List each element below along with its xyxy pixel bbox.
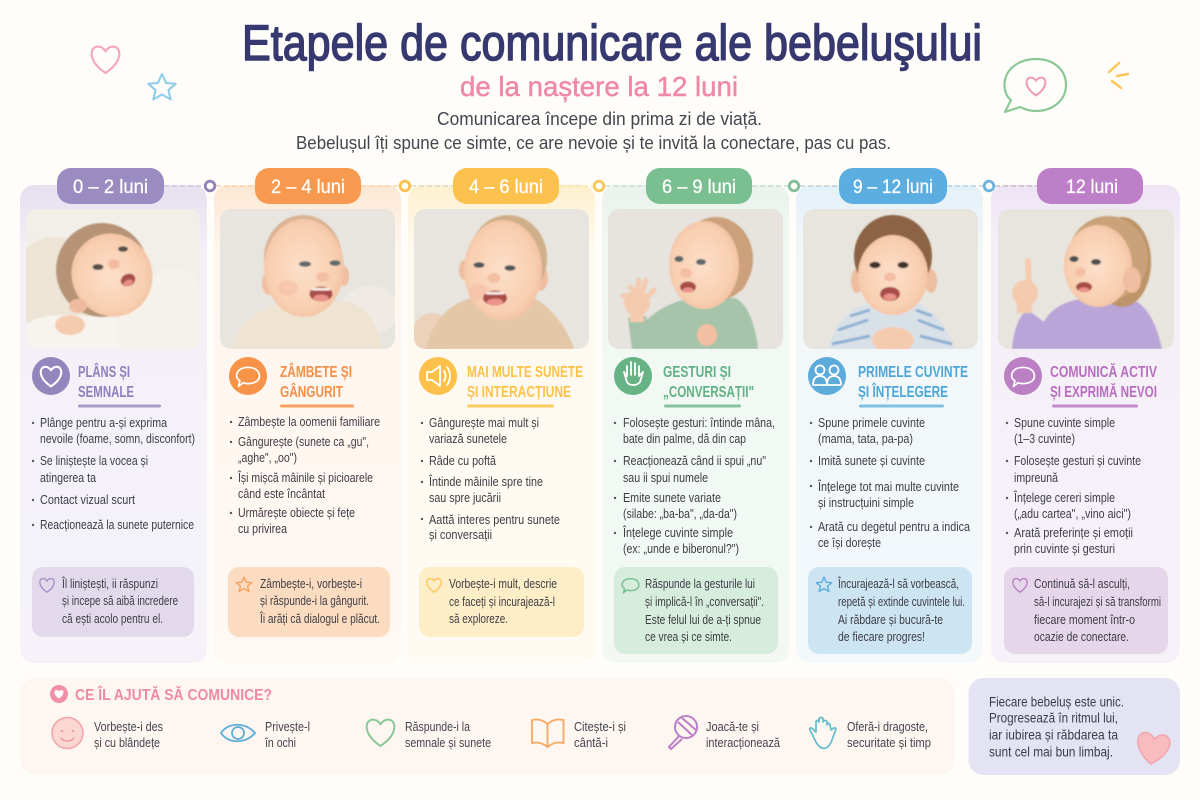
panel: 6–9 luni: [602, 168, 789, 663]
bullet list: („adu cartea", „vino aici"): [1014, 506, 1131, 521]
icon: heart check badge: [50, 685, 68, 703]
heading: MAI MULTE SUNETE: [467, 364, 583, 381]
age pill: [453, 168, 559, 204]
bullet list: Arată preferințe și emoții: [1014, 525, 1133, 540]
photo: newborn lying down: [10, 209, 200, 349]
title: Etapele de comunicare ale bebeluşului: [242, 15, 982, 71]
callout: every baby is unique: [968, 678, 1180, 775]
bullet list: [614, 415, 775, 556]
bullet list: bate din palme, dă din cap: [623, 431, 746, 446]
tip box: și răspunde-i la gângurit.: [260, 593, 369, 608]
heading: ȘI ÎNȚELEGERE: [858, 382, 948, 401]
heading underline: [859, 404, 944, 408]
tip box: fiecare moment într-o: [1034, 612, 1135, 627]
bullet list: variază sunetele: [429, 431, 507, 446]
icon: pink heart: [1135, 732, 1171, 766]
card background: [602, 185, 789, 663]
heading underline: [664, 404, 741, 408]
bullet list: Emite sunete variate: [623, 490, 721, 505]
bullet list: Se liniștește la vocea și: [40, 453, 148, 468]
age pill: 9 – 12 luni: [853, 176, 933, 198]
bullet list: Aattă interes pentru sunete: [429, 512, 560, 527]
heading: ZÂMBETE ȘI: [280, 362, 352, 381]
bullet list: impreună: [1014, 470, 1059, 485]
panel: 4–6 luni: [408, 168, 595, 663]
icon: hand gesture: [614, 357, 652, 395]
callout: every baby is unique: iar iubirea și răbdarea ta: [989, 726, 1118, 742]
item: read: [532, 719, 626, 750]
tip box: ce vrea și ce simte.: [645, 629, 732, 644]
callout: every baby is unique: Progresează în ritmul lui,: [989, 710, 1118, 726]
bullet list: Râde cu poftă: [429, 453, 497, 468]
bullet list: Înțelege cuvinte simple: [622, 525, 733, 540]
photo: laughing baby: [412, 209, 589, 357]
bullet list: (ex: „unde e biberonul?"): [623, 541, 739, 556]
tip box: de fiecare progres!: [838, 629, 925, 644]
bullet list: [32, 415, 195, 532]
bullet list: atingerea ta: [40, 470, 97, 485]
item: eye contact: [221, 719, 310, 750]
bullet list: cu privirea: [238, 521, 288, 536]
bullet list: Arată cu degetul pentru a indica: [818, 519, 971, 534]
bullet list: [810, 415, 971, 550]
tip box: repetă și extinde cuvintele lui.: [838, 594, 965, 609]
heading underline: [1052, 404, 1138, 408]
bullet list: Gângurește mai mult și: [429, 415, 539, 430]
tip box: Îi arăți că dialogul e plăcut.: [259, 611, 380, 626]
panel: 0–2 luni: [10, 168, 207, 663]
bullet list: Folosește gesturi și cuvinte: [1014, 453, 1141, 468]
timeline node markers: [205, 181, 994, 191]
bullet list: Spune cuvinte simple: [1014, 415, 1115, 430]
intro text: [296, 109, 891, 153]
bullet list: nevoile (foame, somn, disconfort): [40, 431, 195, 446]
bullet list: Își mișcă mâinile și picioarele: [237, 470, 373, 485]
tip box: ce faceți și incurajează-l: [449, 594, 555, 609]
icon: speaker: [419, 357, 457, 395]
tip box: și implică-l în „conversații".: [645, 594, 764, 609]
heading: GÂNGURIT: [280, 382, 343, 401]
bullet list: [1006, 415, 1141, 556]
bullet list: (silabe: „ba-ba", „da-da"): [623, 506, 737, 521]
heading: ȘI INTERACȚIUNE: [467, 384, 571, 401]
item: respond: Răspunde-i la: [405, 719, 471, 734]
icon: speech bubble with heart: [1004, 59, 1066, 112]
callout: every baby is unique: sunt cel mai bun limbaj.: [989, 744, 1113, 760]
tip box: ocazie de conectare.: [1034, 629, 1129, 644]
panel: what helps communication: [20, 678, 955, 775]
bullet list: Întinde mâinile spre tine: [428, 474, 543, 489]
tip box: Vorbește-i mult, descrie: [449, 576, 557, 591]
bullet list: Plânge pentru a-și exprima: [40, 415, 168, 430]
item: respond: semnale și sunete: [405, 735, 491, 750]
icon: heart: [32, 357, 70, 395]
age pill: [1037, 168, 1143, 204]
item: talk: [52, 718, 163, 750]
bullet list: Gângurește (sunete ca „gu",: [238, 434, 369, 449]
bullet list: (1–3 cuvinte): [1014, 431, 1075, 446]
bullet list: (mama, tata, pa-pa): [818, 431, 913, 446]
tip box: Zâmbește-i, vorbește-i: [260, 576, 362, 591]
bullet list: și instrucțuini simple: [818, 495, 914, 510]
card background: [214, 185, 401, 663]
icon: speech bubble: [1004, 357, 1042, 395]
card background: [408, 185, 595, 663]
section heading: CE ÎL AJUTĂ SĂ COMUNICE?: [75, 685, 272, 704]
tip box: și incepe să aibă incredere: [62, 593, 178, 608]
heading: COMUNICĂ ACTIV: [1050, 362, 1157, 381]
tip box: [32, 567, 194, 637]
heading underline: [467, 404, 554, 408]
tip box: [614, 567, 778, 654]
bullet list: Imită sunete și cuvinte: [818, 453, 925, 468]
item: love and security: [810, 718, 931, 750]
item: play: Joacă-te și: [706, 719, 759, 734]
heading: „CONVERSAȚII": [663, 384, 754, 401]
intro text: Bebelușul îți spune ce simte, ce are nevoie și te invită la conectare, pas cu pas.: [296, 133, 891, 153]
photo: toddler pointing: [998, 209, 1174, 349]
heading: [280, 362, 352, 401]
bullet list: Urmărește obiecte și fețe: [238, 505, 355, 520]
item: love and security: Oferă-i dragoste,: [847, 719, 928, 734]
bullet list: sau ii spui numele: [623, 470, 708, 485]
age pill: [255, 168, 361, 204]
icon: decorative heart: [92, 47, 119, 73]
icon: speech bubble: [229, 357, 267, 395]
item: eye contact: Privește-l: [265, 719, 310, 734]
heading underline: [280, 404, 354, 408]
card background: [20, 185, 207, 663]
age pill: 6 – 9 luni: [662, 176, 736, 198]
icon: sparkle lines: [1109, 63, 1128, 88]
bullet list: ce își dorește: [818, 535, 881, 550]
heading: SEMNALE: [78, 384, 134, 401]
age pill: 0 – 2 luni: [73, 176, 148, 198]
bullet list: Folosește gesturi: întinde mâna,: [623, 415, 775, 430]
bullet list: când este încântat: [238, 486, 325, 501]
panel: 9–12 luni: [796, 168, 983, 663]
tip box: [419, 567, 584, 637]
panel: 12 luni: [991, 168, 1180, 663]
age pill: 12 luni: [1066, 176, 1118, 198]
bullet list: Zâmbește la oomenii familiare: [238, 414, 380, 429]
age pill: [646, 168, 752, 204]
bullet list: Reacționează la sunete puternice: [40, 517, 194, 532]
bullet list: „aghe", „oo"): [238, 450, 297, 465]
item: respond: [367, 719, 491, 750]
heading: ȘI EXPRIMĂ NEVOI: [1050, 382, 1157, 401]
tip box: Continuă să-l asculți,: [1034, 576, 1130, 591]
bullet list: Spune primele cuvinte: [818, 415, 925, 430]
tip box: să exploreze.: [449, 611, 508, 626]
tip box: [228, 567, 390, 637]
tip box: Ai răbdare și bucură-te: [838, 612, 943, 627]
panel background: [20, 678, 955, 775]
item: read: Citește-i și: [574, 719, 626, 734]
photo: waving baby: [608, 209, 783, 349]
bullet list: Contact vizual scurt: [40, 492, 135, 507]
heading: [663, 364, 754, 401]
heading underline: [78, 404, 161, 408]
age pill: [839, 168, 947, 204]
card background: [991, 185, 1180, 663]
bullet list: sau spre jucării: [429, 490, 501, 505]
panel: 2–4 luni: [214, 168, 401, 663]
bullet list: Înțelege tot mai multe cuvinte: [817, 479, 959, 494]
heading: PLÂNS ȘI: [78, 362, 130, 381]
bullet list: [421, 415, 560, 542]
bullet list: prin cuvinte și gesturi: [1014, 541, 1115, 556]
heading: [78, 362, 134, 401]
item: eye contact: în ochi: [264, 735, 296, 750]
heading: GESTURI ȘI: [663, 364, 731, 381]
icon: decorative star: [148, 74, 176, 99]
tip box: Este felul lui de a-ți spnue: [645, 612, 761, 627]
age pill: 4 – 6 luni: [469, 176, 543, 198]
item: read: cântă-i: [574, 735, 608, 750]
age pill: 2 – 4 luni: [271, 176, 345, 198]
item: play: [669, 716, 781, 750]
heading: [467, 364, 583, 401]
bullet list: și conversații: [429, 527, 492, 542]
tip box: că ești acolo pentru el.: [62, 611, 163, 626]
tip box: Încurajează-l să vorbească,: [837, 576, 959, 591]
tip box: Răspunde la gesturile lui: [645, 576, 755, 591]
age pill: [57, 168, 164, 204]
tip box: [808, 567, 972, 654]
callout: every baby is unique: Fiecare bebeluș este unic.: [989, 694, 1124, 710]
item: talk: și cu blândețe: [94, 735, 160, 750]
item: play: interacționează: [706, 735, 781, 750]
card background: [796, 185, 983, 663]
icon: two people: [808, 357, 846, 395]
intro text: Comunicarea începe din prima zi de viață.: [437, 109, 762, 129]
photo: smiling baby: [220, 209, 400, 349]
timeline connector: [164, 185, 1037, 187]
tip box: [1004, 567, 1168, 654]
bullet list: Înțelege cereri simple: [1013, 490, 1115, 505]
item: talk: Vorbește-i des: [94, 719, 163, 734]
photo: talking baby in striped top: [803, 209, 978, 353]
bullet list: [230, 414, 380, 536]
heading: PRIMELE CUVINTE: [858, 364, 968, 381]
item: love and security: securitate și timp: [847, 735, 931, 750]
subtitle: de la naștere la 12 luni: [460, 71, 738, 102]
tip box: Îl liniștești, ii răspunzi: [61, 576, 158, 591]
heading: [1050, 362, 1157, 401]
heading: [858, 364, 968, 401]
bullet list: Reacționează când ii spui „nu": [623, 453, 766, 468]
